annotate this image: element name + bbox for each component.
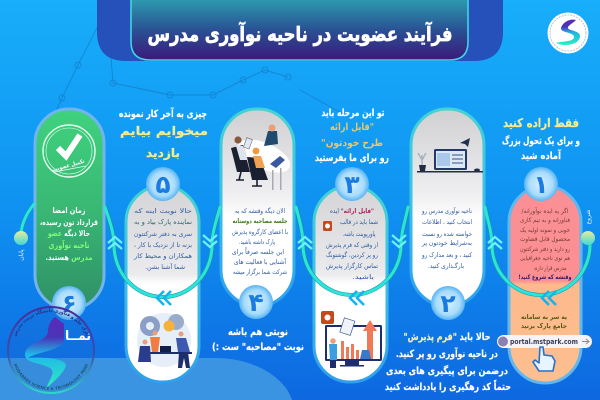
badge: number 5: ۵ <box>155 170 171 199</box>
text block: step 4: جلسه مصاحبه دوستانه <box>232 217 288 225</box>
title banner <box>97 0 503 61</box>
heading: step 3: طرح خودتون" <box>321 138 383 149</box>
badge: number 3: ۳ <box>344 170 360 199</box>
watermark logo: نما: MODARRES SCIENCE & TECHNOLOGY PARK <box>14 363 88 390</box>
text block: step 5 <box>133 207 192 271</box>
panel: step 4 <box>221 109 295 306</box>
panel: step 1 <box>497 186 592 383</box>
icon: membership stamp: تکمیل عضویت <box>52 158 85 173</box>
text block: step 3: رو پر کردین، گوشتونگ <box>326 251 378 259</box>
heading: step 2: در ناحیه نوآوری رو پر کنید. <box>396 347 498 360</box>
text block: step 1: هم توی ناحیه جغرافیایی <box>520 255 570 262</box>
text block: step 3: باشید. <box>352 273 374 281</box>
text block: step 4: این جلسه صرفاً برای <box>232 247 284 256</box>
heading: step 2: حتماً کد رهگیری را یادداشت کنید <box>385 379 511 393</box>
text block: portal call to action: یه سر به سامانه <box>521 313 567 321</box>
heading: step 3: رو برای ما بفرستید <box>315 153 389 164</box>
heading: step 4: نوبت "مصاحبه" ست :) <box>212 342 304 353</box>
text block: portal call to action <box>521 313 567 330</box>
badge: number 6 <box>52 286 86 320</box>
text block: step 6: ناحیه نوآوری <box>48 239 90 251</box>
text block: step 4 <box>232 207 288 276</box>
watermark logo: نما <box>7 306 95 394</box>
heading: step 1 <box>502 116 580 162</box>
text block: step 6: مدرس هستید. <box>46 253 93 263</box>
watermark logo: نما: نمــا <box>65 329 91 344</box>
badge: number 1: ۱ <box>533 170 549 199</box>
title text: فرآیند عضویت در ناحیه نوآوری مدرس <box>148 21 452 46</box>
text block: portal call to action: جامع پارک بزنید <box>521 322 567 330</box>
illustration: team with gears <box>137 313 192 368</box>
text block: step 6: قرارداد تون رسیده، <box>40 218 98 227</box>
text block: step 5: نماینده پارک بیاد و به <box>134 218 192 226</box>
panel: step 2 <box>411 109 484 306</box>
heading: step 1: آماده شید <box>521 149 561 162</box>
text block: step 2: به‌شرایط خودتون پر <box>421 239 472 247</box>
badge: number 5 <box>146 167 180 201</box>
icon: membership stamp <box>43 125 95 177</box>
text block: step 1: فناورانه و به تیم کاری <box>520 217 570 224</box>
text block: step 2: ناحیه نوآوری مدرس رو <box>421 206 472 215</box>
text block: step 5: سری به دفتر شرکتتون <box>134 230 192 238</box>
heading: step 4 <box>212 327 304 353</box>
heading: step 2: درضمن برای پیگیری های بعدی <box>386 364 508 377</box>
logo: top right <box>548 12 588 54</box>
text block: step 4: الان دیگه وقتشه که به <box>235 207 285 215</box>
illustration: laptop <box>417 138 483 172</box>
text block: step 4: پارک داشته باشید. <box>239 238 275 246</box>
badge: number 3 <box>335 167 369 201</box>
text block: step 1: محصول قابل قضاوت <box>520 236 570 243</box>
badge: number 1 <box>524 167 558 201</box>
text block: step 1 <box>518 206 572 281</box>
heading: step 1: فقط اراده کنید <box>503 116 579 130</box>
badge: number 2: ۲ <box>440 289 456 318</box>
badge: number 2 <box>431 286 465 320</box>
illustration: interview meeting <box>231 124 295 190</box>
url bar: portal.mstpark.com <box>510 338 578 346</box>
text block: step 6: حالا دیگه عضو <box>47 228 90 238</box>
text block: step 3: تماس کارگزار پذیرش <box>326 262 378 270</box>
arc strokes over panels <box>21 204 590 297</box>
illustration: presentation charts <box>321 311 382 368</box>
text block: step 4: با اعضای کارگروه پذیرش <box>232 228 288 236</box>
heading: step 3: تو این مرحله باید <box>322 108 385 119</box>
text block: step 2: کنید ، و بعد مدارک رو <box>421 251 473 259</box>
heading: step 4: نوبتی هم باشه <box>228 327 288 338</box>
arrows: chevrons <box>108 235 556 305</box>
text block: step 2: بارگـذاری کنید. <box>428 262 464 270</box>
start dot and label: شروع <box>585 210 592 224</box>
text block: step 3: از وقتی که فرم پذیرش <box>326 241 378 249</box>
text block: step 6 <box>40 206 98 263</box>
url bar <box>497 335 592 348</box>
text block: step 1: اگر یه ایده نوآورانه/ <box>522 206 569 215</box>
text block: step 2: خواسته شده رو نسبت <box>422 230 472 238</box>
badge: number 4 <box>239 285 273 319</box>
heading: step 3 <box>315 108 389 164</box>
text block: step 5: حالا نوبت اینه که <box>134 207 192 215</box>
connector arcs <box>21 204 590 297</box>
heading: step 5 <box>119 107 208 160</box>
heading: step 5: چیزی به آخر کار نمونده <box>119 107 207 120</box>
icon: powerpoint <box>323 221 332 231</box>
text block: step 5: بزنه تا از نزدیک با کار ، <box>134 241 192 249</box>
text block: step 3: پاورپوینت باشه. <box>342 230 376 238</box>
heading: step 2 <box>385 332 511 393</box>
text block: step 3: "فایل ارائه" ایده <box>330 207 374 215</box>
start dot and label <box>581 210 595 245</box>
badge: number 4: ۴ <box>248 288 264 317</box>
end dot and label: پایان <box>18 249 25 261</box>
heading: step 5: بازدید <box>146 146 180 160</box>
panel: step 6 <box>35 109 104 309</box>
text block: step 3: شما باید در قالب <box>340 218 378 226</box>
text block: step 6: زمان امضا <box>52 206 86 215</box>
panel: step 5 <box>126 186 199 382</box>
text block: step 2 <box>421 206 473 270</box>
text block: step 4: شرکت شما برگزار میشه <box>233 268 287 276</box>
text block: step 1: رو دارید و دفتر شرکتتون <box>520 246 570 253</box>
panel: step 3 <box>314 186 387 382</box>
watermark logo: نما: پارک علم و فناوری دانشگاه تربیت مدرس <box>14 308 89 336</box>
text block: step 3 <box>326 207 378 281</box>
heading: step 3: "فایل ارائه <box>330 122 374 133</box>
text block: step 4: آشنایی با فعالیت های <box>234 257 287 266</box>
end dot and label <box>14 231 28 261</box>
icon: pointing hand <box>533 347 555 371</box>
text block: step 5: همکاران و محیط کار <box>133 252 192 260</box>
heading: step 5: میخوایم بیایم <box>120 124 208 139</box>
text block: step 5: شما آشنا بشن. <box>145 262 185 271</box>
text block: step 1: وقتشه که شروع کنید! <box>518 274 572 281</box>
text block: step 1: خوبی و نمونه اولیه یک <box>520 227 570 234</box>
heading: step 2: حالا باید "فرم پذیرش" <box>404 332 490 343</box>
text block: step 1: مدرس قرار داره، <box>534 265 566 272</box>
text block: step 2: انتخاب کنید ، اطلاعات <box>422 218 472 226</box>
badge: number 6: ۶ <box>61 289 77 318</box>
